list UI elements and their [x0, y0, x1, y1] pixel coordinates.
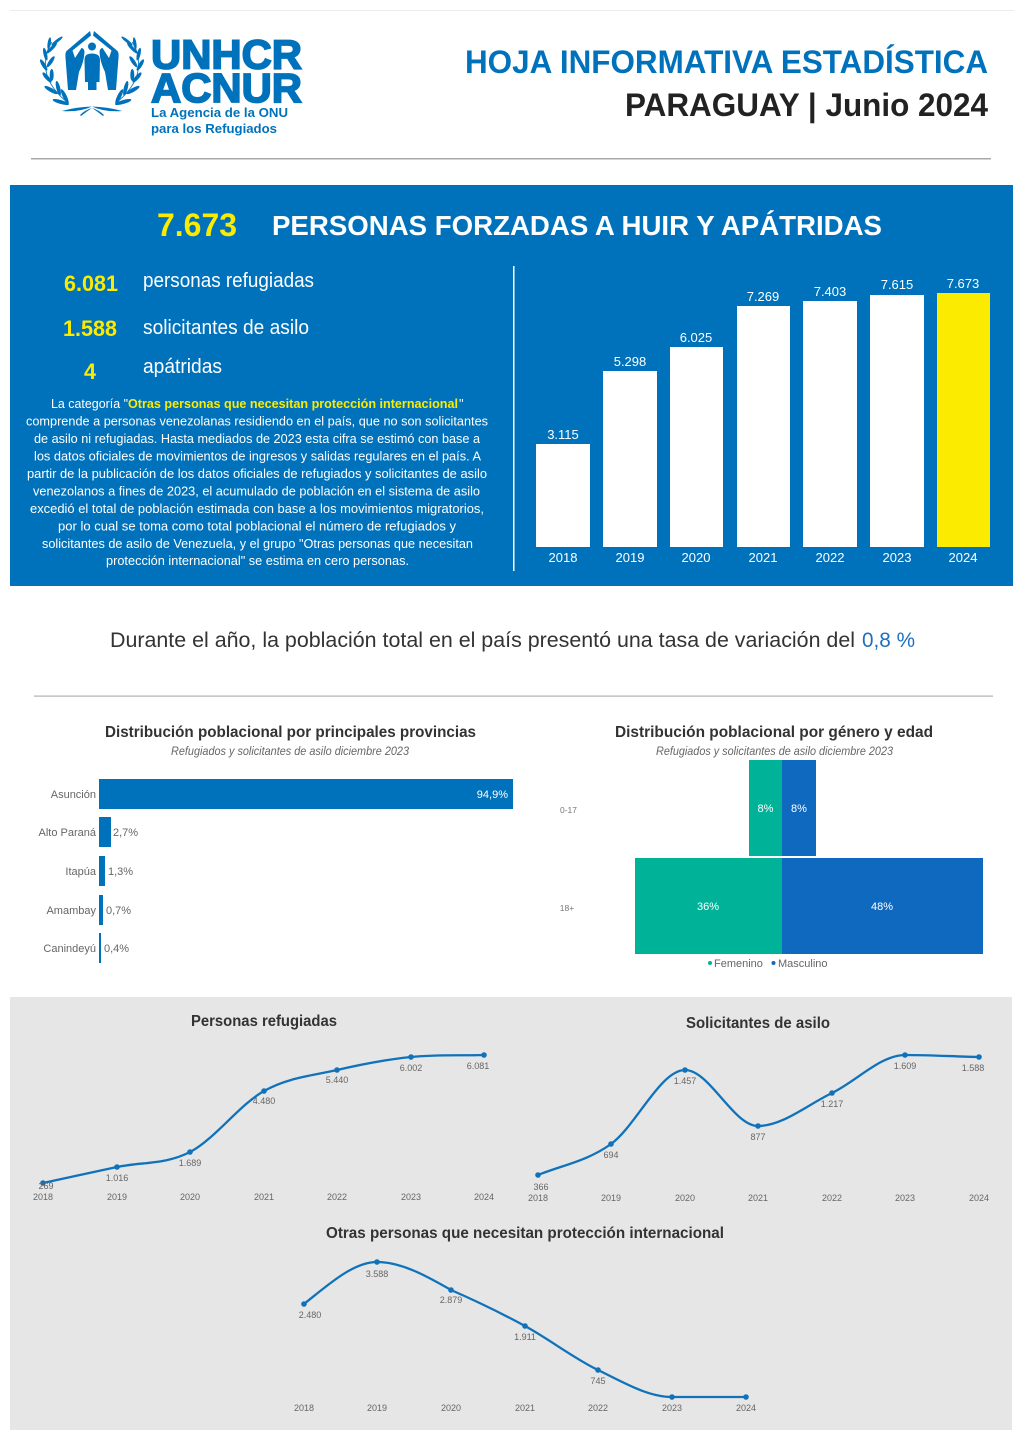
line chart: asylum seekers: 2021: [748, 1193, 768, 1203]
line chart: others in need of international protection: 2018: [294, 1403, 314, 1413]
line chart: asylum seekers: 2023: [895, 1193, 915, 1203]
legend: Masculino: [778, 958, 828, 970]
line chart: others in need of international protection: 3.588: [366, 1269, 388, 1279]
line chart: refugees: 6.081: [467, 1061, 489, 1071]
line chart: asylum seekers: Solicitantes de asilo: [686, 1015, 830, 1032]
population pyramid: 8%: [791, 803, 807, 815]
line chart: asylum seekers: 1.609: [894, 1061, 916, 1071]
line chart: refugees: 2024: [474, 1192, 494, 1202]
bar chart: total by year: 6.025: [680, 330, 712, 345]
bar chart: total by year: 2020: [682, 550, 710, 565]
line chart: refugees: 2020: [180, 1192, 200, 1202]
line chart: refugees: 2021: [254, 1192, 274, 1202]
explanatory paragraph: ": [459, 396, 464, 411]
line chart: others in need of international protection: 2023: [662, 1403, 682, 1413]
line chart: asylum seekers: 1.457: [674, 1076, 696, 1086]
line chart: asylum seekers: 1.588: [962, 1063, 984, 1073]
bar chart: provinces: 0,7%: [106, 905, 131, 917]
variation rate statement: Durante el año, la población total en el país presentó una tasa de variación del: [110, 628, 855, 652]
line chart: refugees: 2018: [33, 1192, 53, 1202]
bar chart: total by year: 7.615: [881, 277, 913, 292]
line chart: asylum seekers: 2018: [528, 1193, 548, 1203]
title: [465, 44, 988, 123]
population pyramid: 48%: [871, 901, 893, 913]
panel heading: PERSONAS FORZADAS A HUIR Y APÁTRIDAS: [272, 210, 882, 241]
icon: laurel wreath: [39, 36, 145, 116]
population pyramid: 36%: [697, 901, 719, 913]
bar chart: provinces: [39, 779, 513, 963]
logo wordmark: [151, 32, 302, 136]
bar chart: provinces: Itapúa: [65, 866, 97, 878]
key figures: apátridas: [143, 356, 222, 378]
key figures: solicitantes de asilo: [143, 317, 309, 339]
explanatory paragraph: venezolanos a fines de 2023, el acumulado de población en el sistema de asilo: [33, 484, 480, 498]
key figures: [63, 270, 314, 384]
bar chart: total by year: 2019: [616, 550, 644, 565]
line chart: asylum seekers: 2022: [822, 1193, 842, 1203]
explanatory paragraph: de asilo ni refugiadas. Hasta mediados de 2023 esta cifra se estimó con base a: [34, 431, 481, 446]
line chart: others in need of international protection: [294, 1225, 756, 1413]
population pyramid: 8%: [758, 803, 774, 815]
explanatory paragraph: por lo cual se toma como total poblacional el número de refugiados y: [58, 518, 456, 534]
bar chart: provinces: Canindeyú: [43, 943, 96, 955]
bar chart: provinces: Amambay: [46, 905, 96, 917]
population pyramid: 0-17: [560, 805, 577, 815]
bar chart: provinces: 1,3%: [108, 866, 133, 878]
line chart: asylum seekers: 2019: [601, 1193, 621, 1203]
legend: [708, 958, 828, 970]
bar chart: total by year: 2018: [549, 550, 577, 565]
line chart: refugees: 2019: [107, 1192, 127, 1202]
line chart: asylum seekers: 1.217: [821, 1099, 843, 1109]
bar chart: total by year: 2022: [816, 550, 844, 565]
panel: trends: [10, 997, 1012, 1430]
explanatory paragraph: excedió el total de población estimada con base a los movimientos migratorios,: [30, 501, 484, 516]
bar chart: provinces: Asunción: [51, 789, 96, 801]
line chart: others in need of international protection: 2021: [515, 1403, 535, 1413]
bar chart: total by year: [536, 276, 990, 565]
line chart: refugees: 1.016: [106, 1173, 128, 1183]
explanatory paragraph: los datos oficiales de movimientos de ingresos y salidas regulares en el país. A: [34, 448, 481, 464]
panel: distribution by province: [39, 724, 513, 963]
line chart: asylum seekers: 877: [750, 1132, 766, 1142]
explanatory paragraph: protección internacional" se estima en cero personas.: [106, 553, 409, 568]
subheading: Refugiados y solicitantes de asilo diciembre 2023: [656, 744, 893, 758]
bar chart: total by year: 7.673: [947, 276, 979, 291]
bar chart: total by year: 7.269: [747, 289, 779, 304]
logo: UNHCR ACNUR: [39, 31, 302, 136]
heading: Distribución poblacional por género y edad: [615, 724, 933, 741]
subheading: Refugiados y solicitantes de asilo diciembre 2023: [171, 744, 409, 758]
key figures: 1.588: [63, 316, 117, 341]
bar chart: provinces: 0,4%: [104, 943, 129, 955]
panel: distribution by gender and age: [560, 724, 983, 970]
line chart: asylum seekers: 2020: [675, 1193, 695, 1203]
logo wordmark: ACNUR: [151, 65, 302, 111]
logo wordmark: para los Refugiados: [151, 121, 277, 136]
explanatory paragraph: [26, 396, 488, 568]
line chart: asylum seekers: 2024: [969, 1193, 989, 1203]
logo wordmark: UNHCR: [151, 32, 302, 78]
line chart: refugees: [33, 1013, 494, 1202]
bar chart: total by year: 2024: [949, 550, 977, 565]
line chart: refugees: 6.002: [400, 1063, 422, 1073]
logo wordmark: La Agencia de la ONU: [151, 105, 288, 120]
line chart: others in need of international protection: 2.879: [440, 1295, 462, 1305]
population pyramid: [560, 760, 983, 954]
title: HOJA INFORMATIVA ESTADÍSTICA: [465, 44, 988, 80]
line chart: others in need of international protection: 2022: [588, 1403, 608, 1413]
line chart: refugees: 5.440: [326, 1075, 348, 1085]
line chart: asylum seekers: [528, 1015, 989, 1203]
bar chart: total by year: 7.403: [814, 284, 846, 299]
explanatory paragraph: partir de la publicación de los datos oficiales de refugiados y solicitantes de asilo: [27, 466, 487, 481]
population pyramid: 18+: [560, 903, 574, 913]
icon: sheltering hands and person: [65, 31, 119, 90]
line chart: asylum seekers: 366: [533, 1182, 549, 1192]
bar chart: total by year: 3.115: [547, 427, 579, 442]
variation rate statement: 0,8 %: [862, 628, 915, 652]
line chart: others in need of international protection: 1.911: [514, 1332, 536, 1342]
explanatory paragraph: solicitantes de asilo de Venezuela, y el grupo "Otras personas que necesitan: [42, 536, 473, 551]
line chart: others in need of international protection: 2024: [736, 1403, 756, 1413]
bar chart: provinces: Alto Paraná: [39, 827, 97, 839]
line chart: others in need of international protection: 745: [590, 1376, 606, 1386]
line chart: refugees: Personas refugiadas: [191, 1013, 337, 1030]
explanatory paragraph: La categoría ": [51, 396, 128, 411]
heading: Distribución poblacional por principales provincias: [105, 724, 476, 741]
line chart: others in need of international protection: 2019: [367, 1403, 387, 1413]
bar chart: total by year: 5.298: [614, 354, 646, 369]
line chart: refugees: 4.480: [253, 1096, 275, 1106]
line chart: others in need of international protection: 2.480: [299, 1310, 321, 1320]
legend: Femenino: [714, 958, 763, 970]
line chart: others in need of international protection: Otras personas que necesitan protección internacional: [326, 1225, 724, 1242]
bar chart: provinces: 2,7%: [113, 827, 138, 839]
key figures: 6.081: [64, 271, 118, 296]
explanatory paragraph: comprende a personas venezolanas residiendo en el país, que no son solicitantes: [26, 414, 488, 428]
panel heading: 7.673: [157, 207, 237, 243]
line chart: refugees: 269: [38, 1181, 54, 1191]
bar chart: total by year: 2023: [883, 550, 911, 565]
key figures: personas refugiadas: [143, 270, 314, 292]
line chart: refugees: 2022: [327, 1192, 347, 1202]
bar chart: provinces: 94,9%: [477, 789, 508, 801]
title: PARAGUAY | Junio 2024: [625, 87, 988, 123]
line chart: others in need of international protection: 2020: [441, 1403, 461, 1413]
panel: total population: [10, 185, 1013, 586]
line chart: asylum seekers: 694: [603, 1150, 619, 1160]
key figures: 4: [84, 359, 97, 384]
bar chart: total by year: 2021: [749, 550, 777, 565]
explanatory paragraph: Otras personas que necesitan protección internacional: [128, 396, 458, 411]
line chart: refugees: 1.689: [179, 1158, 201, 1168]
line chart: refugees: 2023: [401, 1192, 421, 1202]
